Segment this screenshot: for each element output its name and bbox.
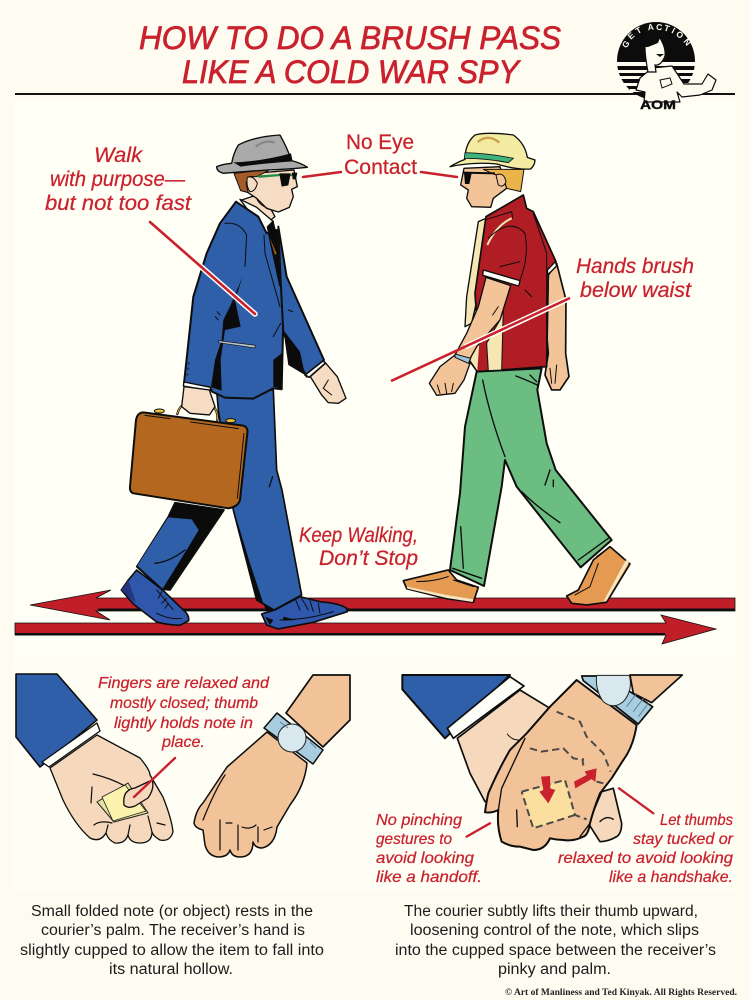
text block: right description: loosening control of the note, which slips [410,922,699,939]
jacket and torso [182,135,346,415]
near hand [429,355,470,395]
road arrow: left to right [15,615,716,644]
icon: Art of Manliness logo: T [663,23,672,34]
sunglasses [258,175,297,177]
callout: keep walking: Don’t Stop [319,547,418,570]
road arrow: right to left [30,590,735,620]
courier fingers [588,788,622,842]
text block: left description [20,903,324,978]
cream placket [465,218,486,327]
cuff [447,677,524,738]
head [461,167,507,207]
icon: Art of Manliness logo: T [634,24,644,36]
cuff [483,270,520,286]
near hand [182,387,215,415]
icon: Art of Manliness logo: N [681,37,693,48]
head [247,170,297,212]
text block: right description: The courier subtly lifts their thumb upward, [404,903,698,920]
far hand [309,363,346,403]
text block: left description: slightly cupped to allow the item to fall into [20,942,324,959]
panel: note in courier's palm [16,674,350,857]
callout: no eye contact: No Eye [346,131,414,154]
arrow: note falls [539,776,555,803]
callout: no eye contact [344,131,417,179]
callout: no pinching: avoid looking [376,850,474,867]
near cuff [183,382,211,391]
figure: courier in blue suit [121,135,347,629]
watch [264,713,323,764]
callout: walk with purpose: with purpose— [50,168,186,191]
text block: right description [395,903,716,978]
icon: Art of Manliness logo [617,22,716,112]
icon: Art of Manliness logo: O [674,29,686,41]
jacket details [215,223,293,337]
text block: left description: Small folded note (or object) rests in the [31,903,313,920]
callout: mostly closed; thumb [110,695,258,712]
sleeve [402,675,510,738]
callout: keep walking [299,524,418,570]
icon: Art of Manliness logo: C [656,22,663,32]
callout: walk with purpose [45,144,192,215]
annotation line: walk with purpose [150,222,255,314]
thumb [124,780,153,807]
callout: hands brush below waist [576,255,694,302]
receiver hand [194,675,350,857]
icon: Art of Manliness logo: I [670,25,677,35]
hat [450,133,535,169]
neck and shirt [242,195,275,223]
icon: Art of Manliness logo: AOM [640,98,676,112]
shoes [403,547,630,605]
callout: no pinching [376,812,482,886]
annotation lines [467,788,653,837]
callout: hands brush below waist: below waist [580,279,692,302]
callout: keep walking: Keep Walking, [299,524,418,547]
title: HOW TO DO A BRUSH PASS [139,20,561,56]
figure: receiver in red shirt and green pants [403,133,630,605]
folded note [97,783,148,822]
front leg [217,390,347,629]
jacket [184,202,283,399]
callout: let thumbs: like a handshake. [609,869,733,886]
tie [267,220,282,287]
pants [450,368,612,586]
cuff [42,723,100,767]
far arm [278,227,324,377]
collar and yoke [487,212,547,347]
callout: let thumbs: stay tucked or [633,831,734,848]
sleeve [488,226,526,280]
rear leg [121,503,224,625]
title: LIKE A COLD WAR SPY [182,54,522,90]
hat [217,135,307,173]
icon: Art of Manliness logo: A [647,22,654,32]
text block: right description: into the cupped space between the receiver’s [395,942,716,959]
arrow: thumb lifts [574,768,597,788]
arm [455,277,511,362]
annotation line [134,758,175,797]
callout: let thumbs [558,812,734,886]
courier hand [16,674,173,843]
dashed finger outline [557,712,611,772]
text block: left description: its natural hollow. [109,961,233,978]
watch [455,354,471,363]
callout: walk with purpose: but not too fast [45,192,192,215]
shirt [469,195,556,372]
glasses [463,170,495,176]
callout: let thumbs: Let thumbs [660,812,733,829]
icon: Art of Manliness logo: E [626,30,637,41]
callout: no pinching: like a handoff. [376,869,482,886]
callout: lightly holds note in [114,715,253,732]
callout: no pinching: No pinching [376,812,462,829]
front shoe [262,597,347,629]
callout [98,675,270,751]
annotation lines: no eye contact [303,172,457,177]
callout: let thumbs: relaxed to avoid looking [558,850,733,867]
callout: Fingers are relaxed and [98,675,270,692]
panel: the pass [376,675,734,886]
callout: hands brush below waist: Hands brush [576,255,694,278]
text block: left description: courier’s palm. The receiver’s hand is [41,922,305,939]
callout: no eye contact: Contact [344,156,417,179]
arm [630,675,682,703]
callout: walk with purpose: Walk [94,144,144,167]
sleeve [16,674,97,767]
icon: Art of Manliness logo: G [620,38,632,50]
briefcase [130,403,247,508]
title [139,20,561,90]
shadow under arm [211,277,243,391]
watch [582,676,653,724]
courier hand [457,690,550,802]
note [522,780,575,828]
torso and arms [429,133,569,395]
annotation line: hands brush [391,298,570,381]
rear shoe [121,570,189,625]
side stripes [487,307,503,371]
rear arm [545,263,569,390]
text block: right description: pinky and palm. [498,961,611,978]
receiver hand [485,680,637,850]
copyright: © Art of Manliness and Ted Kinyak. All Rights Reserved. [505,987,737,998]
callout: place. [161,734,205,751]
callout: no pinching: gestures to [376,831,452,848]
